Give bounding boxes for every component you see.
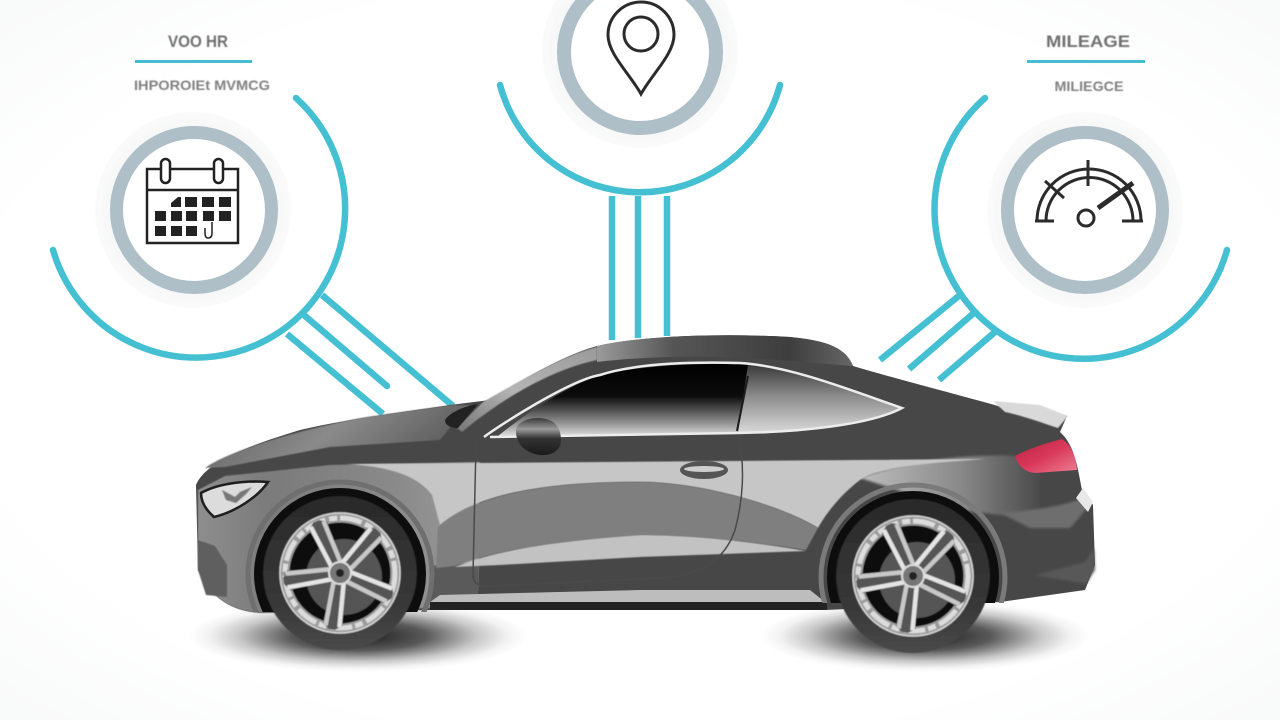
rear wheel arch — [818, 482, 1008, 603]
panel: year — [53, 32, 453, 414]
tail light — [1015, 439, 1077, 473]
panel: mileage — [880, 32, 1227, 380]
heading underline: year — [135, 60, 252, 63]
icon: calendar — [147, 159, 238, 243]
teal arc: year — [53, 98, 345, 358]
lower door highlight — [455, 535, 806, 567]
grille — [198, 540, 227, 597]
connector lines: mileage — [880, 295, 995, 380]
icon: location pin — [608, 2, 674, 94]
wiper — [445, 404, 478, 428]
spoiler — [993, 401, 1068, 428]
car body — [196, 335, 1095, 613]
subtitle: year: IHPOROIEt MVMCG — [134, 77, 270, 93]
teal arc: mileage — [935, 98, 1227, 359]
rear window — [738, 365, 902, 433]
heading underline: mileage — [1027, 60, 1145, 63]
window chrome trim — [484, 363, 902, 437]
circle ring: location — [542, 0, 738, 148]
front fender — [198, 462, 480, 613]
window divider — [737, 376, 748, 431]
mid door shading — [436, 482, 818, 568]
panel: location — [500, 0, 780, 340]
rear quarter panel — [860, 455, 1040, 515]
teal arc: location — [500, 85, 780, 192]
A-pillar — [457, 347, 597, 432]
front wheel — [263, 496, 417, 650]
circle ring: year — [95, 112, 291, 308]
icon: speedometer — [1035, 160, 1143, 226]
sill — [430, 590, 827, 610]
light door band — [345, 459, 985, 528]
door handle — [680, 461, 728, 479]
front wheel arch — [246, 480, 434, 612]
headlight — [201, 482, 268, 517]
roof — [597, 335, 853, 366]
door outline — [473, 435, 742, 586]
circle ring: mileage — [987, 112, 1183, 308]
car — [196, 335, 1095, 669]
subtitle: mileage: MILIEGCE — [1054, 78, 1124, 94]
ground shadows — [188, 600, 1090, 672]
front window — [498, 364, 748, 436]
mirror — [516, 418, 561, 455]
heading: mileage: MILEAGE — [1046, 32, 1130, 51]
connector lines: year — [287, 295, 453, 414]
rear bumper — [1000, 488, 1095, 584]
heading: year: VOO HR — [168, 32, 228, 51]
hood — [205, 405, 470, 468]
connector lines: location — [612, 196, 667, 340]
lower front door area — [430, 562, 478, 602]
rear wheel — [836, 499, 990, 653]
